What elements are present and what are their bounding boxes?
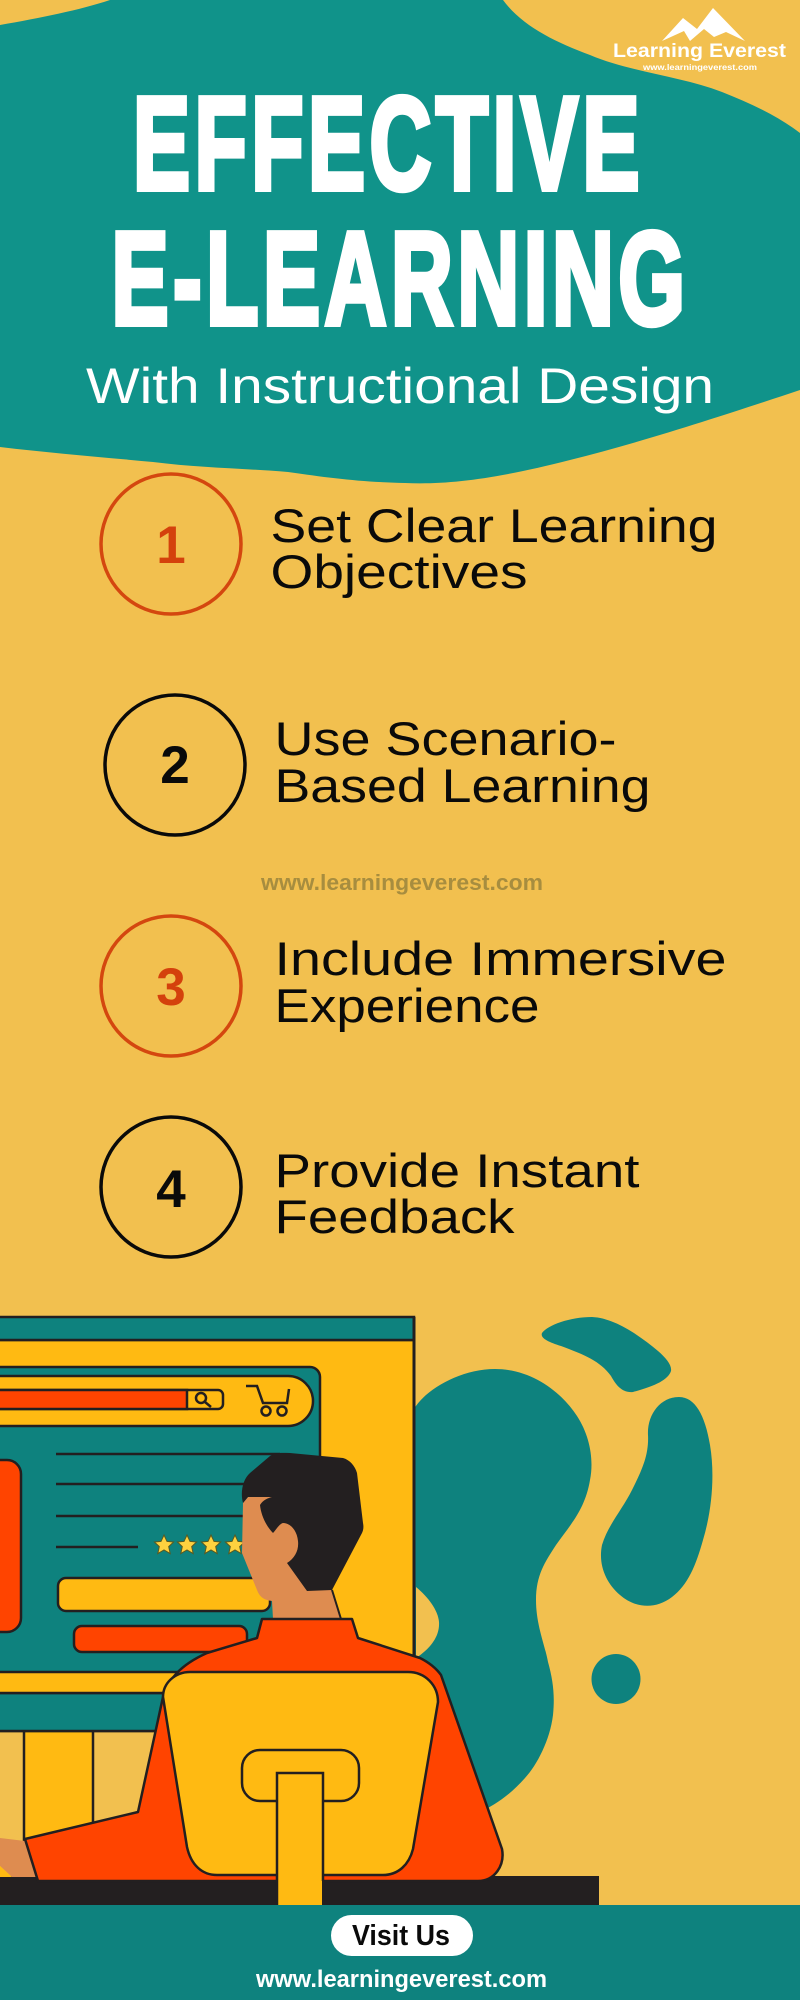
office chair xyxy=(163,1672,438,1905)
icon: mountain xyxy=(662,8,745,41)
subtitle: With Instructional Design xyxy=(86,358,714,414)
orange shirt xyxy=(25,1619,503,1881)
step 4 text xyxy=(274,1144,640,1243)
product image card xyxy=(0,1460,21,1632)
web page panel xyxy=(0,1367,320,1672)
monitor right edge xyxy=(412,1317,416,1660)
chair headrest mount xyxy=(242,1750,359,1801)
search box xyxy=(0,1390,223,1409)
monitor stand xyxy=(0,1731,167,1881)
logo: Learning Everest xyxy=(613,8,787,72)
step 3 text xyxy=(274,932,726,1032)
question mark blobs xyxy=(414,1317,712,1812)
step 1 text xyxy=(270,499,718,598)
red button xyxy=(74,1626,247,1652)
visit us button xyxy=(331,1915,473,1956)
number badge 2 xyxy=(105,695,245,835)
desk xyxy=(0,1876,599,1905)
hand xyxy=(0,1838,38,1877)
navigation bar xyxy=(0,1376,313,1426)
number badge 1 xyxy=(101,474,241,614)
step 2 text: Based Learning xyxy=(274,759,650,812)
step 1 xyxy=(101,474,718,614)
monitor screen xyxy=(0,1340,414,1693)
illustration: person xyxy=(0,1453,503,1881)
visit us button: Visit Us xyxy=(352,1920,450,1952)
number badge 3: 3 xyxy=(156,958,186,1017)
monitor title bar xyxy=(0,1317,414,1340)
background bump beside monitor xyxy=(416,1587,439,1658)
hair xyxy=(242,1453,363,1591)
footer band xyxy=(0,1905,800,2000)
step 2 text: Use Scenario- xyxy=(274,712,616,765)
footer url: www.learningeverest.com xyxy=(255,1966,547,1993)
chair post base xyxy=(279,1881,322,1905)
description lines xyxy=(56,1454,280,1547)
step 1 text: Objectives xyxy=(270,545,528,598)
step 3 text: Include Immersive xyxy=(274,932,726,985)
chair back xyxy=(163,1672,438,1875)
step 2 xyxy=(105,695,650,835)
teal header blob xyxy=(0,0,800,483)
number badge 4 xyxy=(101,1117,241,1257)
icon: magnifier xyxy=(196,1393,211,1407)
step 4 xyxy=(101,1117,640,1257)
step 1 text: Set Clear Learning xyxy=(270,499,718,552)
watermark url: www.learningeverest.com xyxy=(260,870,543,895)
step 3 xyxy=(101,916,726,1056)
rating stars xyxy=(154,1535,245,1554)
step 4 text: Provide Instant xyxy=(274,1144,640,1197)
monitor lower bezel xyxy=(0,1693,237,1731)
skin: face and neck xyxy=(242,1497,340,1619)
neck line xyxy=(332,1590,341,1619)
number badge 4: 4 xyxy=(156,1160,186,1219)
step 4 text: Feedback xyxy=(274,1190,515,1243)
step 2 text xyxy=(274,712,650,812)
icon: shopping cart xyxy=(246,1386,289,1416)
logo url: www.learningeverest.com xyxy=(642,63,757,72)
number badge 1: 1 xyxy=(156,516,186,575)
yellow button xyxy=(58,1578,270,1611)
logo name: Learning Everest xyxy=(613,41,787,62)
number badge 3 xyxy=(101,916,241,1056)
step 3 text: Experience xyxy=(274,979,540,1032)
footer xyxy=(0,1905,800,2000)
illustration: monitor xyxy=(0,1317,414,1881)
header panel xyxy=(0,0,800,483)
chair post xyxy=(277,1773,323,1905)
number badge 2: 2 xyxy=(160,736,190,795)
